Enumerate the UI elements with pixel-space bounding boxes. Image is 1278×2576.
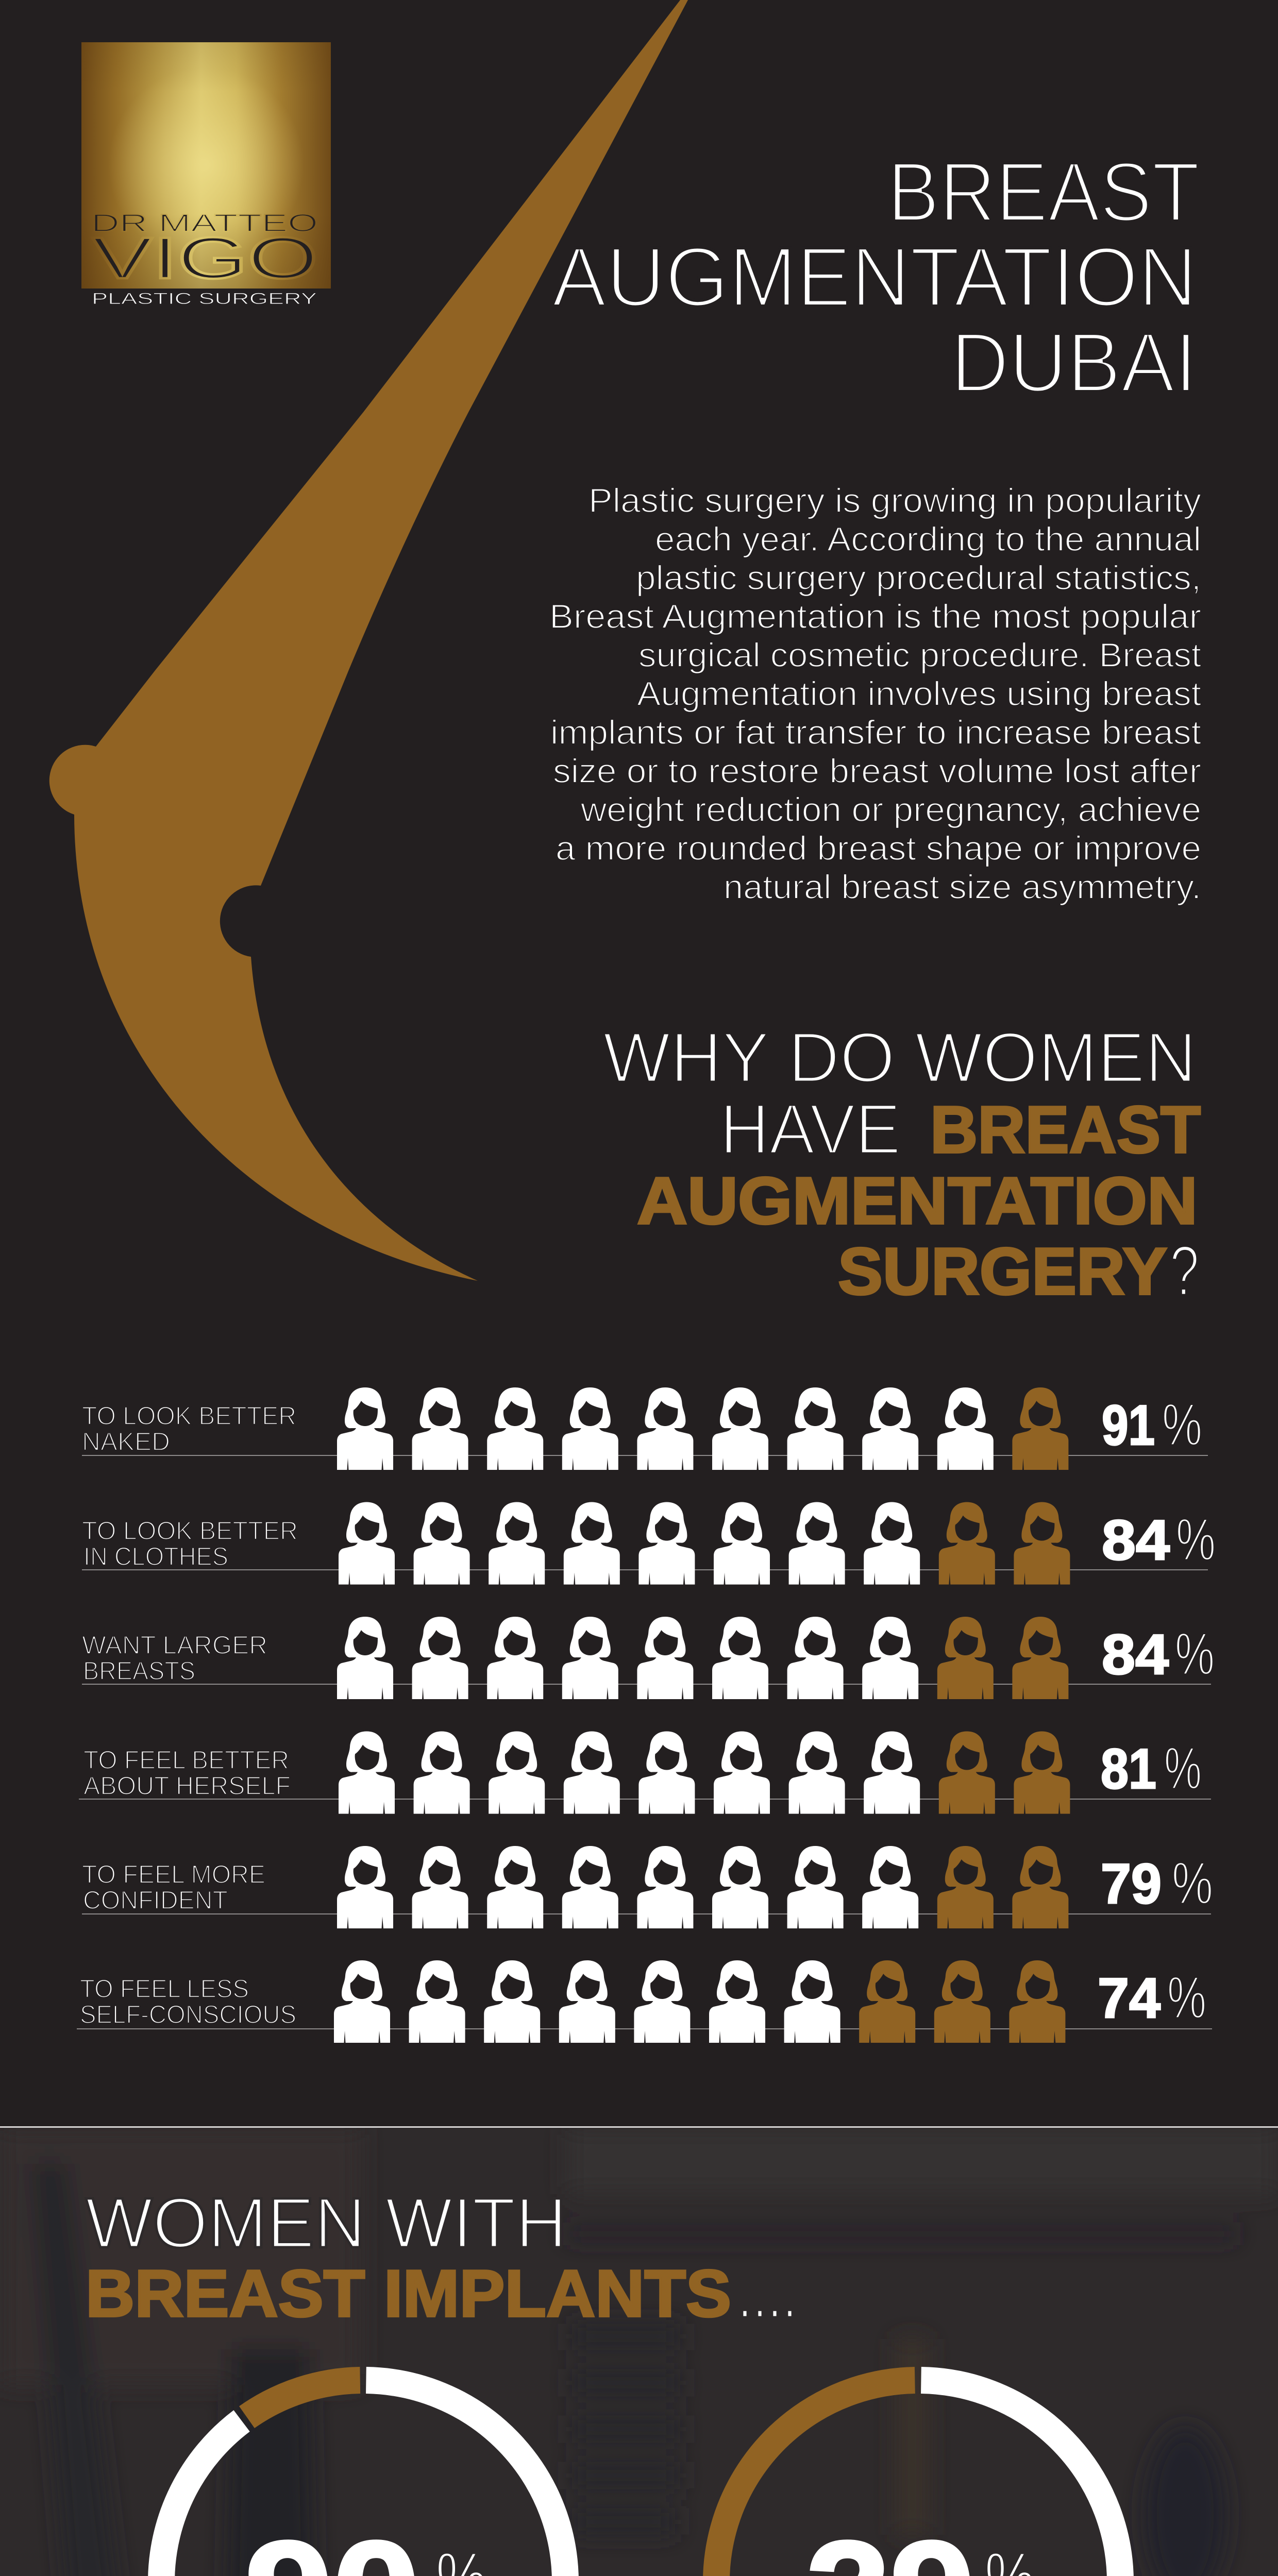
- row: want larger breasts 84%: BREASTS: [83, 1656, 195, 1685]
- heading: ellipsis: ....: [737, 2253, 797, 2333]
- chart: reasons pictogram rows: [77, 1387, 1216, 2043]
- row: want larger breasts 84%: 84: [1102, 1623, 1169, 1686]
- row: to feel less self-conscious 74%: 74: [1098, 1967, 1161, 2030]
- row: to look better in clothes 84%: TO LOOK BETTER: [82, 1516, 298, 1545]
- row: to look better naked 91%: NAKED: [82, 1427, 170, 1456]
- row: to look better naked 91%: [82, 1387, 1208, 1470]
- intro paragraph: Breast Augmentation is the most popular: [549, 597, 1201, 635]
- heading: why do women: AUGMENTATION: [637, 1164, 1198, 1238]
- row: want larger breasts 84%: WANT LARGER: [82, 1631, 267, 1659]
- intro paragraph: Plastic surgery is growing in popularity: [588, 481, 1201, 519]
- blurred photo background: [0, 2127, 1278, 2576]
- heading: why do women: HAVE: [720, 1090, 901, 1169]
- row: to feel less self-conscious 74%: %: [1167, 1964, 1206, 2031]
- panel: women with breast implants: [0, 2126, 1278, 2576]
- intro paragraph: implants or fat transfer to increase breast: [550, 713, 1201, 751]
- row: to look better in clothes 84%: %: [1176, 1506, 1216, 1573]
- title: DUBAI: [951, 315, 1197, 410]
- logo name large: VIGO: [92, 226, 318, 291]
- row: to feel less self-conscious 74%: SELF-CONSCIOUS: [80, 2000, 296, 2029]
- heading: why do women: WHY DO WOMEN: [603, 1018, 1197, 1097]
- row: to feel better about herself 81%: 81: [1101, 1737, 1156, 1801]
- intro paragraph: natural breast size asymmetry.: [724, 868, 1201, 906]
- row: to feel better about herself 81%: [79, 1731, 1211, 1814]
- row: to look better naked 91%: TO LOOK BETTER: [82, 1401, 296, 1430]
- intro paragraph: [549, 481, 1201, 906]
- row: to look better naked 91%: %: [1162, 1391, 1202, 1458]
- row: to look better naked 91%: 91: [1102, 1394, 1155, 1457]
- row: to feel more confident 79%: %: [1172, 1850, 1213, 1917]
- donut: 29%: [670, 2334, 1167, 2576]
- logo tagline: PLASTIC SURGERY: [92, 290, 317, 308]
- row: to feel more confident 79%: TO FEEL MORE: [82, 1860, 265, 1889]
- row: to feel better about herself 81%: %: [1164, 1735, 1202, 1802]
- intro paragraph: Augmentation involves using breast: [637, 674, 1201, 713]
- heading: why do women: [603, 1018, 1201, 1311]
- intro paragraph: plastic surgery procedural statistics,: [636, 558, 1201, 597]
- logo name small: DR MATTEO: [91, 210, 318, 237]
- heading: why do women: BREAST: [930, 1093, 1201, 1167]
- row: want larger breasts 84%: [82, 1617, 1215, 1699]
- title: BREAST: [887, 145, 1200, 239]
- row: to feel more confident 79%: 79: [1101, 1852, 1162, 1916]
- logo gold panel: [81, 42, 331, 289]
- row: want larger breasts 84%: %: [1175, 1620, 1215, 1687]
- intro paragraph: surgical cosmetic procedure. Breast: [638, 636, 1201, 674]
- intro paragraph: size or to restore breast volume lost after: [553, 752, 1201, 790]
- row: to look better in clothes 84%: [82, 1502, 1216, 1585]
- row: to feel less self-conscious 74%: TO FEEL LESS: [80, 1974, 249, 2003]
- intro paragraph: weight reduction or pregnancy, achieve: [580, 790, 1201, 828]
- row: to feel better about herself 81%: TO FEEL BETTER: [83, 1745, 289, 1774]
- heading: why do women: ?: [1170, 1231, 1199, 1311]
- donut: 90%: [82, 2301, 645, 2576]
- logo: Dr Matteo Vigo: [81, 42, 331, 308]
- title: [552, 145, 1200, 410]
- intro paragraph: each year. According to the annual: [655, 520, 1201, 558]
- title: AUGMENTATION: [552, 230, 1197, 324]
- heading: women with: WOMEN WITH: [86, 2183, 567, 2263]
- illustration: gold breast silhouette: [49, 0, 688, 1281]
- row: to feel more confident 79%: [82, 1846, 1213, 1928]
- row: to feel less self-conscious 74%: [77, 1960, 1212, 2043]
- row: to look better in clothes 84%: 84: [1102, 1509, 1170, 1572]
- heading: breast implants: BREAST IMPLANTS: [86, 2257, 731, 2331]
- intro paragraph: a more rounded breast shape or improve: [556, 829, 1201, 867]
- row: to feel more confident 79%: CONFIDENT: [83, 1886, 228, 1914]
- row: to look better in clothes 84%: IN CLOTHES: [83, 1542, 228, 1571]
- heading: why do women: SURGERY: [838, 1234, 1167, 1309]
- row: to feel better about herself 81%: ABOUT HERSELF: [83, 1771, 291, 1800]
